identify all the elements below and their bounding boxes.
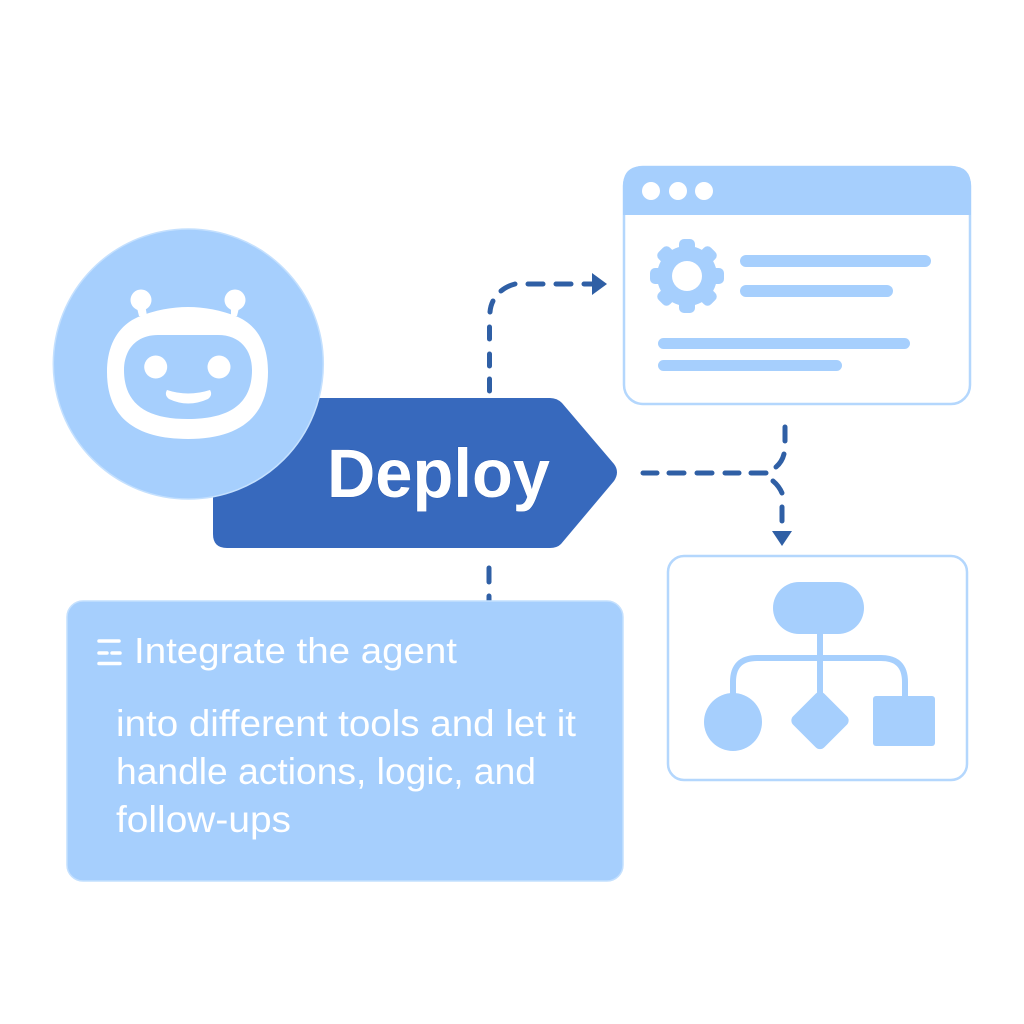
antennas <box>130 290 246 316</box>
connector: branching arrows <box>643 427 792 546</box>
smile <box>166 390 211 404</box>
card heading: Integrate the agent <box>134 630 457 671</box>
card body text <box>116 703 577 840</box>
deploy arrow banner <box>213 398 617 548</box>
browser window panel <box>623 166 971 404</box>
card body text: into different tools and let it <box>116 703 577 744</box>
icon: gear <box>650 239 724 313</box>
text card <box>67 601 623 881</box>
flowchart panel <box>668 556 967 780</box>
icon: list <box>99 641 120 664</box>
card body text: handle actions, logic, and <box>116 751 536 792</box>
connector: deploy to text card <box>486 568 492 602</box>
card body text: follow-ups <box>116 799 291 840</box>
heading: Deploy: Deploy <box>327 435 550 512</box>
robot icon circle <box>53 229 323 499</box>
robot head <box>107 307 268 439</box>
connector: deploy to window arrow <box>490 273 607 391</box>
